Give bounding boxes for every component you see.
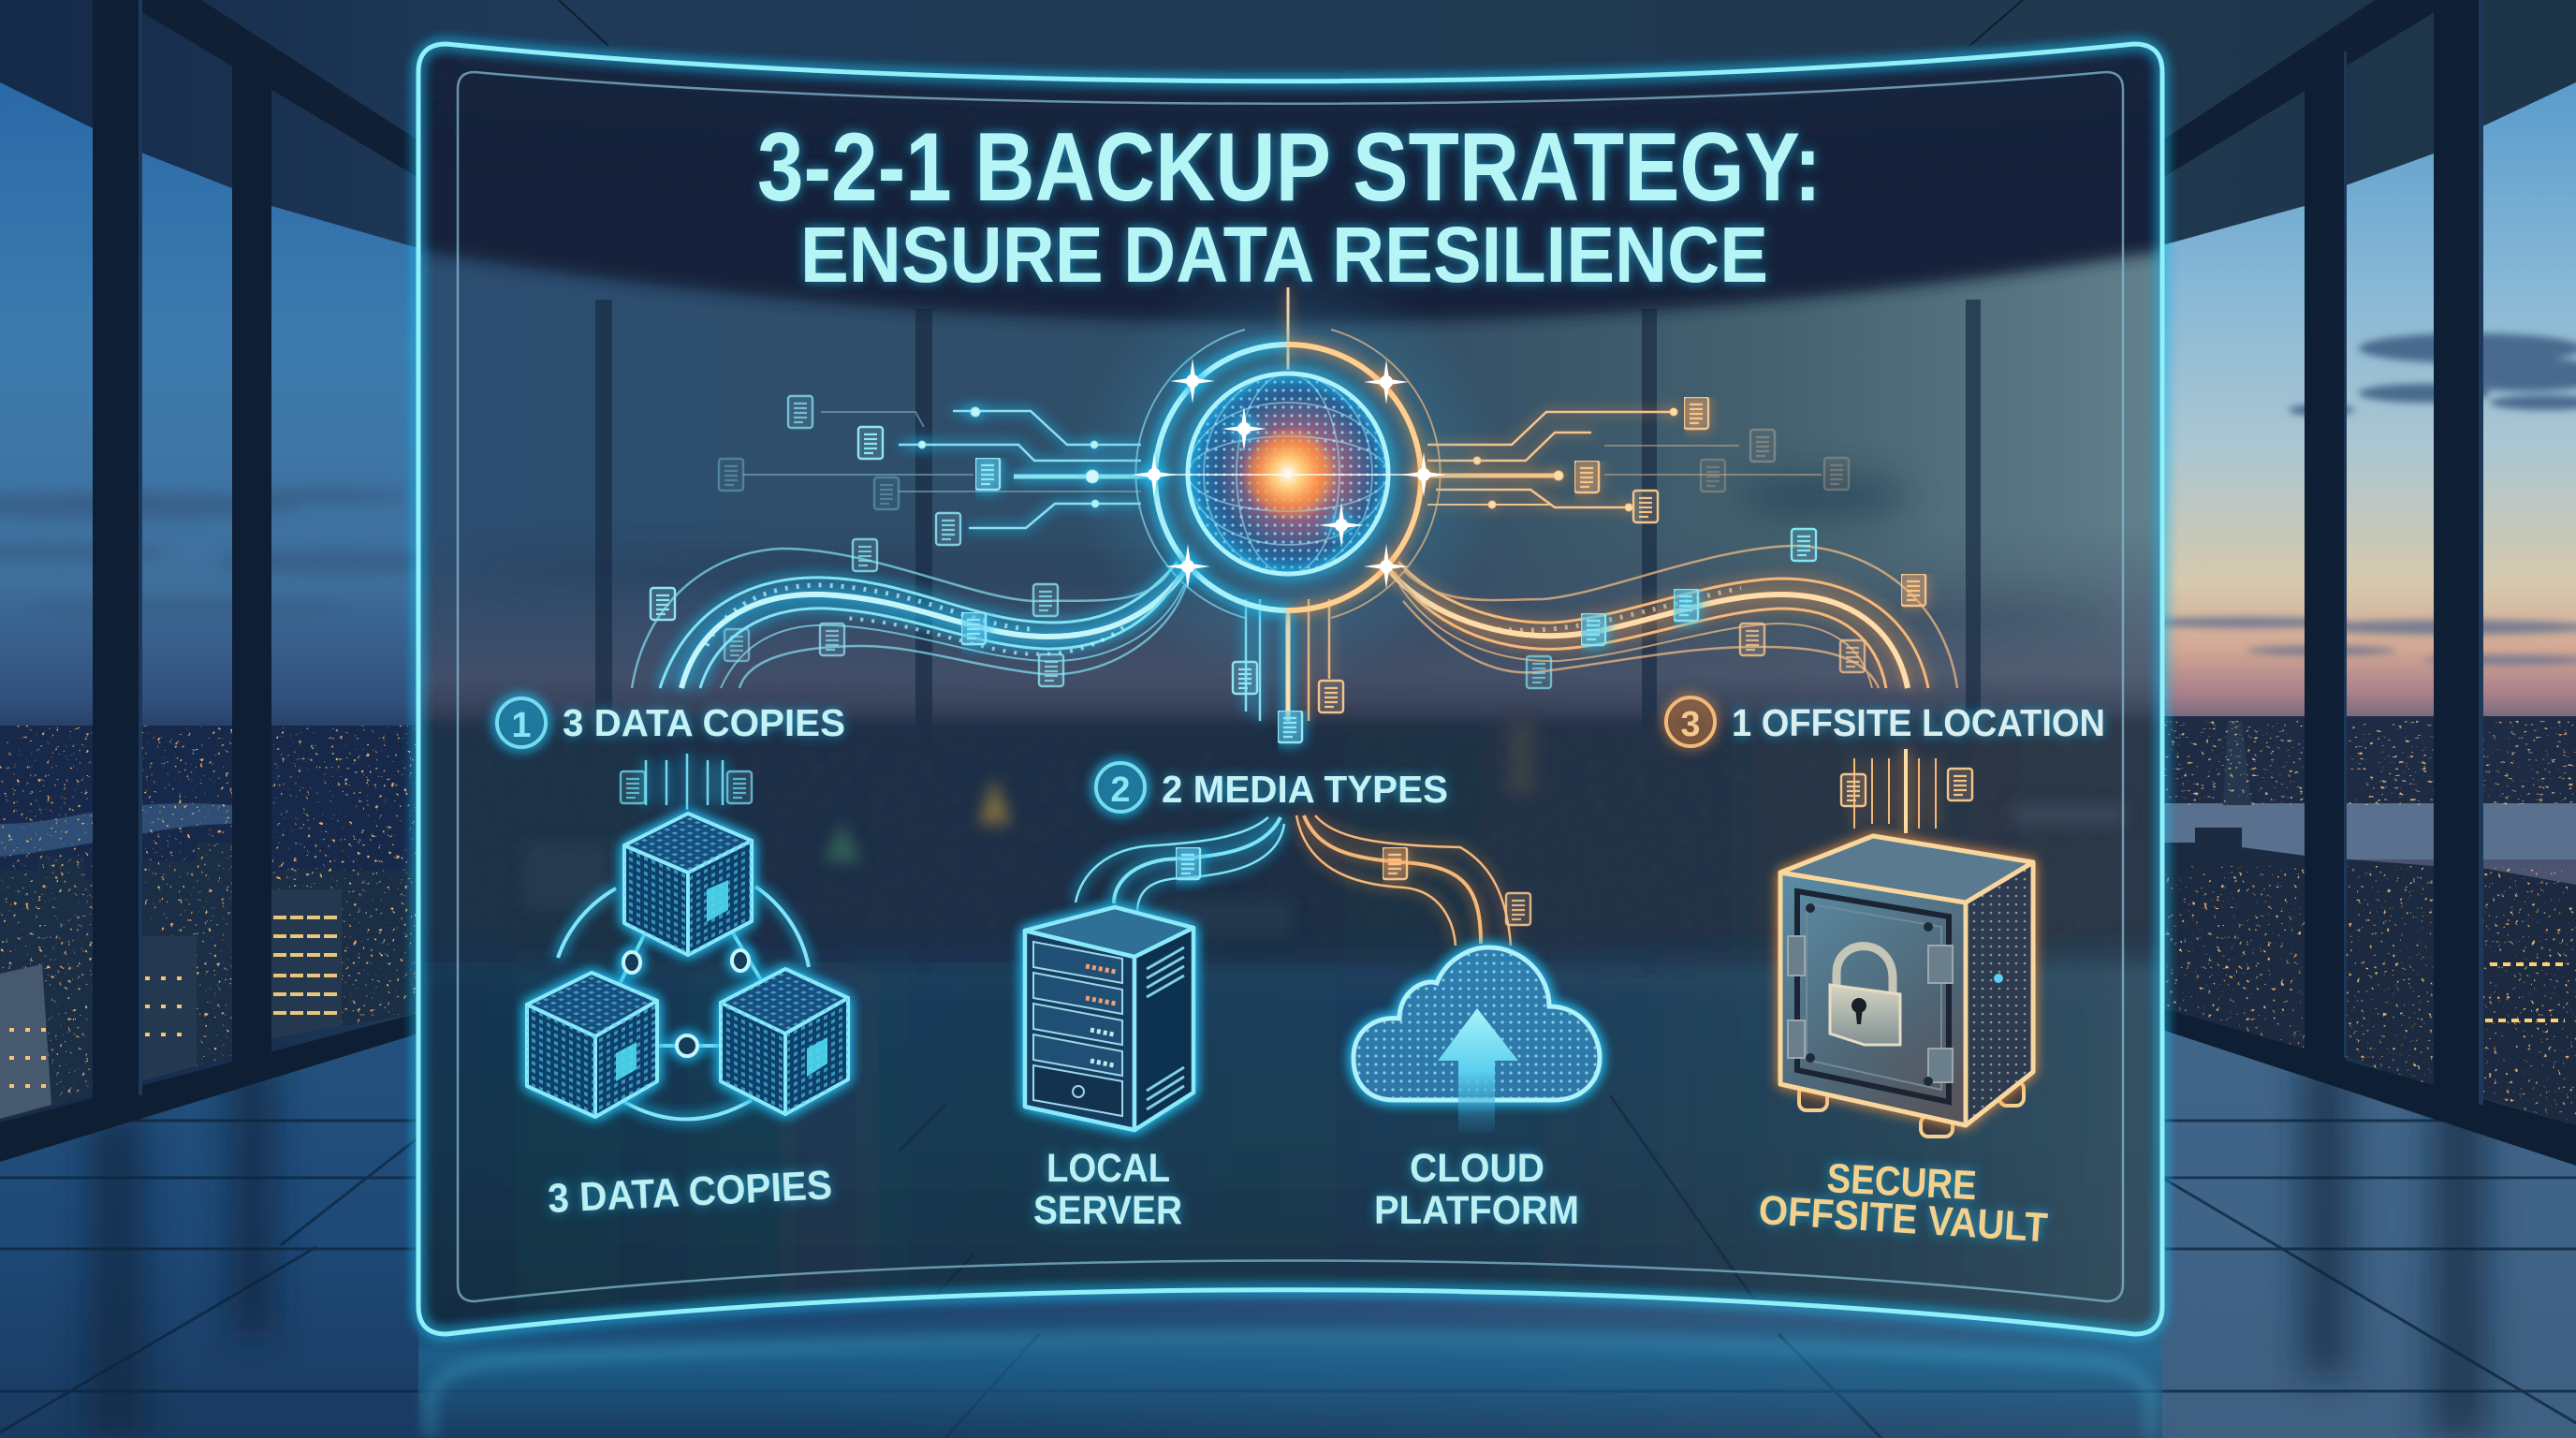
title (757, 113, 1822, 299)
file icons on vertical lines (1233, 662, 1343, 742)
label: local server: LOCAL (1046, 1146, 1170, 1191)
icon: three data copy cubes (527, 754, 848, 1120)
feed lines above vault (1854, 749, 1936, 833)
label: cloud platform: CLOUD (1410, 1146, 1544, 1191)
upload arrow (1438, 1008, 1518, 1133)
reflected glow of panel on floor (418, 1311, 2162, 1438)
dim traces (1604, 446, 1822, 475)
circuit traces: orange (1424, 408, 1677, 511)
door hinges and bolts (1788, 936, 1953, 1082)
data stream to cloud (1296, 815, 1530, 946)
label: local server (1033, 1146, 1182, 1233)
padlock (1830, 946, 1900, 1045)
file icons: left cluster (719, 396, 1000, 545)
outer rings (1135, 330, 1441, 618)
file icons along right stream (1527, 529, 1816, 688)
label: 3 data copies: 3 DATA COPIES (547, 1162, 833, 1222)
title: 3-2-1 BACKUP STRATEGY: (757, 113, 1822, 222)
label: secure offsite vault: SECURE (1825, 1155, 1978, 1209)
glass see-through view (402, 28, 2181, 1356)
globe sphere (1188, 374, 1388, 574)
left cube (527, 973, 657, 1117)
connector nodes (623, 950, 749, 1056)
step 1 label: 1 (511, 706, 532, 745)
label: secure offsite vault: OFFSITE VAULT (1757, 1187, 2049, 1251)
icon: local server (1025, 907, 1193, 1130)
right cube (721, 969, 848, 1114)
left windows: dusk sky and city (0, 82, 416, 1123)
floor (0, 992, 2576, 1438)
left data stream (632, 539, 1189, 688)
title: ENSURE DATA RESILIENCE (800, 211, 1768, 299)
ring and connectors (558, 887, 809, 1120)
globe hot core (1241, 427, 1335, 521)
right data stream (1386, 529, 1957, 688)
sparkle nodes (1132, 359, 1364, 589)
icon: secure vault (1780, 749, 2033, 1137)
file icon (1176, 847, 1200, 879)
file icons: right cluster (1574, 397, 1849, 522)
label: secure offsite vault (1757, 1155, 2049, 1251)
dim traces (743, 412, 1141, 492)
step 2 label: 2 (1110, 770, 1131, 810)
step 3 label: 3 (1680, 705, 1701, 744)
server drawers (1033, 942, 1122, 1116)
file icons along left stream (651, 539, 1063, 686)
file icons (1383, 847, 1530, 925)
step 2 label: 2 MEDIA TYPES (1162, 768, 1448, 811)
panel outer glowing border (418, 44, 2162, 1334)
vault door (1797, 891, 1949, 1102)
panel inner border (458, 72, 2123, 1301)
feed lines above cubes (646, 754, 723, 810)
central vertical data lines (1233, 287, 1343, 742)
step 1 label: 3 DATA COPIES (563, 701, 845, 744)
top cube (624, 814, 752, 955)
right circuit traces and file icons (1424, 397, 1849, 522)
vault body (1780, 836, 2033, 1125)
label: cloud platform (1374, 1146, 1579, 1233)
central globe hub (1073, 258, 1503, 689)
label: cloud platform: PLATFORM (1374, 1188, 1579, 1233)
data stream to local server (1076, 817, 1284, 913)
circuit traces: cyan (899, 407, 1154, 528)
label: local server: SERVER (1033, 1188, 1182, 1233)
icon: cloud with upload arrow (1354, 947, 1600, 1133)
vault feet (1799, 1081, 2024, 1137)
panel: holographic glass screen (402, 28, 2181, 1356)
right windows: sunset sky and city (2144, 56, 2576, 1142)
left circuit traces and file icons (719, 396, 1154, 545)
step 3 label: 1 OFFSITE LOCATION (1732, 701, 2105, 744)
